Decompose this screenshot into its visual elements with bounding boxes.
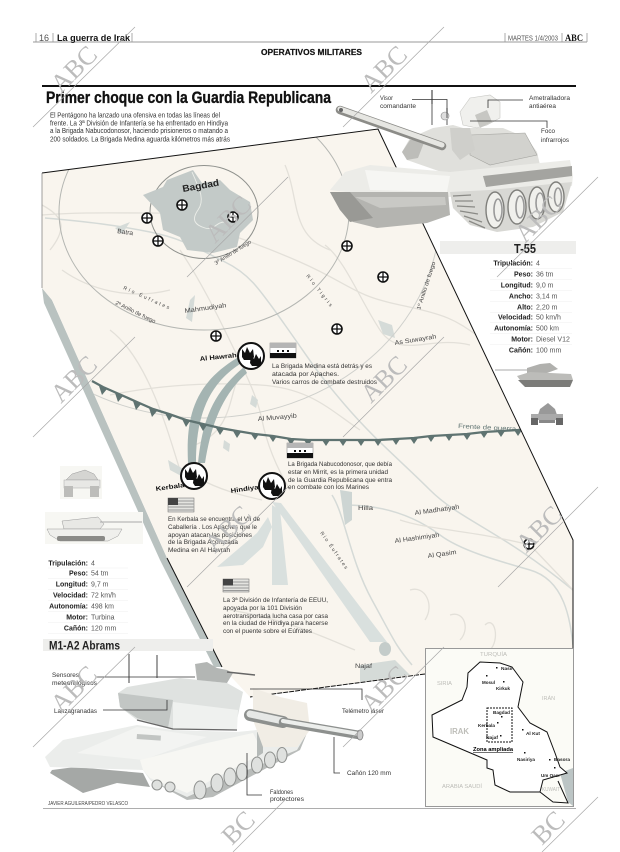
inset locator map: Kirkuk (496, 686, 510, 691)
inset locator map: ARABIA SAUDÍ (442, 783, 483, 790)
map place labels: Kerbala (155, 482, 185, 493)
Abrams heading: M1-A2 Abrams (49, 638, 120, 652)
turret (402, 125, 540, 175)
map place labels: As Suwayrah (394, 333, 437, 347)
map panel (42, 128, 574, 698)
map place labels: Al Hashimiyah (394, 532, 440, 545)
page header (33, 33, 587, 43)
Abrams specifications: 54 tm (91, 570, 109, 578)
credit: JAVIER AGUILERA/PEDRO VELASCO (48, 801, 129, 807)
callout: Kerbala: Caballería . Los Apaches que le (168, 524, 257, 531)
T-55 annotations: infrarrojos (541, 137, 570, 144)
watermarks: ABC (45, 350, 103, 408)
icon: T-55 front view (531, 403, 563, 425)
page header: MARTES 1/4/2003 (508, 36, 558, 42)
T-55 specifications: Cañón: (509, 348, 533, 354)
hull deck (330, 160, 573, 197)
T-55 specifications: 9,0 m (536, 282, 554, 290)
inset locator map (426, 648, 574, 806)
callout: Kerbala: Medina en Al Hawrah (168, 547, 230, 554)
map place labels (114, 178, 517, 670)
map place labels: Frente de guerra (458, 423, 517, 433)
Abrams annotations: Sensores (52, 672, 80, 679)
Abrams specifications: Cañón: (64, 626, 88, 632)
Baghdad urban area (143, 170, 253, 253)
flag: Iraq, Medina (270, 343, 296, 358)
T-55 specifications: 36 tm (536, 272, 554, 278)
Abrams specifications: Peso: (69, 570, 88, 578)
map place labels: Batra (117, 228, 134, 237)
Abrams specifications: 4 (91, 560, 95, 568)
callout: Nabucodonosor brigade: de la Guardia Republicana que entra (288, 477, 392, 484)
Abrams specifications: Motor: (66, 614, 88, 622)
Abrams annotations (52, 672, 391, 803)
callout: Kerbala (168, 516, 260, 554)
Abrams specifications: 9,7 m (91, 582, 109, 588)
inset locator map: IRAK (450, 727, 469, 736)
T-55 specifications: 100 mm (536, 348, 561, 354)
inset locator map: Basora (554, 757, 570, 762)
road wheels (152, 748, 287, 799)
battle icon: Al Hawrah (238, 343, 264, 369)
Abrams specifications: 72 km/h (91, 592, 116, 600)
watermarks: ABC (199, 500, 257, 558)
callout: Medina brigade: La Brigada Medina está detrás y es (272, 363, 373, 370)
T-55 specifications: 500 km (536, 326, 559, 332)
watermarks: ABC (509, 190, 567, 248)
battle icon: Kerbala (181, 463, 207, 489)
battle icon: Hindiya (259, 473, 285, 499)
callout: Medina brigade: atacada por Apaches. (272, 371, 339, 378)
T-55 specifications: 4 (536, 260, 540, 268)
icon: Abrams front view (60, 466, 102, 499)
map place labels: Najaf (355, 663, 372, 670)
map place labels: Hindiya (230, 484, 259, 495)
flag: USA, Kerbala (168, 498, 194, 512)
callout: Nabucodonosor brigade: La Brigada Nabucodonosor, que debía (288, 461, 392, 468)
inset locator map: SIRIA (437, 681, 453, 687)
T-55 heading (440, 241, 576, 256)
page header: ABC (565, 33, 583, 43)
inset locator map: Bagdad (493, 710, 510, 715)
intro text: frente. La 3ª División de Infantería se ha enfrentado en Hindiya (50, 120, 228, 128)
T-55 specifications: Motor: (511, 336, 533, 344)
callout: Hindiya (223, 597, 328, 635)
watermarks: ABC (45, 40, 103, 98)
T-55 specifications (490, 260, 572, 354)
Abrams specifications: Longitud: (56, 582, 88, 588)
callout: Hindiya: en la ciudad de Hindiya para hacerse (223, 620, 328, 627)
concentric rings (58, 138, 436, 418)
Abrams specifications: Autonomía: (49, 604, 88, 610)
watermarks: ABC (355, 350, 413, 408)
Abrams specifications: Velocidad: (53, 592, 88, 600)
watermarks: ABC (199, 190, 257, 248)
hull front (330, 192, 450, 228)
T-55 specifications: Tripulación: (493, 260, 533, 268)
map place labels: Al Muvayyib (258, 413, 297, 423)
cupola and machine gun (195, 662, 233, 683)
map place labels: Río Éufrates (318, 530, 350, 572)
page header: La guerra de Irak (57, 33, 131, 43)
Abrams annotations: Lanzagranadas (54, 708, 98, 715)
watermarks: BC (216, 805, 261, 850)
callout: Kerbala: de la Brigada Acorazada (168, 539, 238, 546)
T-55 specifications: Alto: (517, 304, 533, 312)
Abrams annotations: protectores (270, 796, 305, 803)
map place labels: Al Madhatiyah (414, 504, 460, 517)
turret (253, 688, 310, 747)
title rule (42, 85, 576, 87)
callout: Kerbala: En Kerbala se encuentra el VII de (168, 516, 260, 523)
Abrams specifications: 498 km (91, 604, 114, 610)
callout: Kerbala: apoyan atacan las posiciones (168, 532, 253, 539)
T-55 annotations: Visor (380, 95, 394, 102)
Abrams specifications: 120 mm (91, 626, 116, 632)
flag: USA, Hindiya (223, 579, 249, 592)
inset locator map: Kerbala (478, 723, 495, 728)
map place labels: Bagdad (182, 178, 220, 195)
T-55 specifications: Peso: (514, 272, 533, 278)
callout: Hindiya: con el puente sobre el Eúfrates (223, 628, 313, 635)
callout: Hindiya: apoyada por la 101 División (223, 605, 302, 612)
inset locator map: TURQUÍA (480, 651, 508, 658)
T-55 specifications: 50 km/h (536, 314, 561, 322)
Abrams annotations: Telémetro láser (342, 708, 385, 715)
icon: T-55 side view (495, 363, 573, 387)
T-55 heading: T-55 (514, 241, 536, 256)
intro text (50, 112, 230, 144)
T-55 annotations: Ametralladora (529, 95, 570, 102)
title: Primer choque con la Guardia Republicana (46, 88, 331, 107)
callout: Nabucodonosor brigade: en combate con los Marines (288, 484, 370, 491)
callout: Medina brigade: Varios carros de combate destruidos (272, 379, 378, 386)
page header: 16 (39, 33, 49, 43)
tracks (450, 182, 572, 232)
T-55 specifications: Velocidad: (498, 314, 533, 322)
southern advance arrows (217, 502, 387, 642)
inset locator map: Mosul (482, 680, 495, 685)
flag: Iraq, Nabucodonosor (287, 443, 313, 458)
T-55 specifications: Diesel V12 (536, 336, 570, 344)
map place labels: Río Tigris (304, 274, 334, 310)
intro text: El Pentágono ha lanzado una ofensiva en todas las líneas del (50, 112, 220, 120)
inset locator map: Nasir (501, 666, 513, 671)
gun (340, 110, 442, 146)
map place labels: Al Qasim (427, 549, 457, 560)
callout: Nabucodonosor brigade (288, 461, 392, 491)
intro text: a la Brigada Nabucodonosor, haciendo prisioneros o matando a (50, 128, 228, 135)
T-55 annotations: antiaérea (529, 103, 556, 110)
T-55 annotations: comandante (380, 103, 416, 110)
map place labels: Mahmudiyah (184, 302, 227, 315)
Abrams specifications (48, 560, 128, 634)
watermarks: ABC (355, 660, 413, 718)
inset locator map: IRÁN (542, 695, 555, 702)
callout: Nabucodonosor brigade: estar en Mirrit, es la primera unidad (288, 469, 388, 476)
Abrams heading (43, 638, 213, 652)
Abrams annotations: meteorológicos (52, 680, 98, 687)
T-55 specifications: 2,20 m (536, 304, 558, 312)
T-55 specifications: Autonomía: (494, 326, 533, 332)
map place labels: 3º Anillo de fuego (213, 239, 253, 267)
illustration: T-55 tank (330, 90, 573, 232)
callout: Hindiya: La 3ª División de Infantería de EEUU, (223, 597, 328, 604)
map place labels: Al Hawrah (199, 352, 237, 363)
watermarks: ABC (510, 500, 568, 558)
Abrams specifications: Turbina (91, 614, 115, 622)
T-55 annotations (380, 90, 570, 144)
target markers (142, 200, 534, 549)
callout: Hindiya: aerotransportada lucha casa por casa (223, 613, 328, 620)
T-55 specifications: Ancho: (509, 294, 533, 300)
intro text: 200 soldados. La Brigada Medina aguarda kilómetros más atrás (50, 136, 230, 144)
icon: Abrams side view (45, 512, 143, 544)
watermarks: ABC (45, 660, 103, 718)
illustration: M1-A2 Abrams tank (45, 654, 363, 800)
roads and rivers (42, 165, 573, 682)
attack arrows (188, 358, 247, 463)
inset locator map: Zona ampliada (473, 747, 514, 753)
map place labels: Río Éufrates (122, 284, 172, 312)
inset locator map: Nasiriya (517, 757, 535, 762)
map place labels: 2º Anillo de fuego (114, 300, 157, 325)
inset locator map: Um Qasr (541, 773, 560, 778)
inset locator map: KUWAIT (542, 787, 560, 793)
T-55 specifications: Longitud: (501, 282, 533, 290)
Abrams specifications: Tripulación: (48, 560, 88, 568)
T-55 annotations: Foco (541, 128, 555, 135)
war front line (92, 381, 525, 446)
section label: OPERATIVOS MILITARES (261, 48, 363, 57)
inset locator map: Al Kut (526, 731, 540, 736)
Abrams annotations: Faldones (270, 789, 294, 796)
bottom rule (43, 807, 576, 810)
Abrams annotations: Cañón 120 mm (347, 770, 391, 777)
callout: Medina brigade (272, 363, 378, 386)
lower hull and tracks (50, 767, 150, 793)
hull top (45, 725, 307, 797)
watermarks: ABC (355, 40, 413, 98)
map place labels: Hilla (358, 505, 373, 512)
map place labels: 1º Anillo de fuego (415, 261, 437, 311)
gun (250, 715, 283, 722)
inset locator map: Najaf (486, 735, 499, 740)
T-55 specifications: 3,14 m (536, 294, 558, 300)
watermarks: BC (526, 805, 571, 850)
